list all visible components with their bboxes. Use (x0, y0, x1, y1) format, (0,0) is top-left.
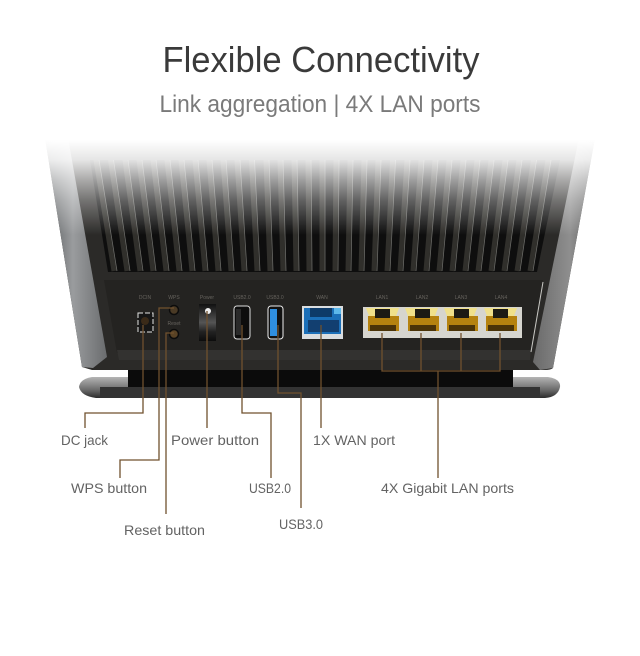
label: LAN ports: 4X Gigabit LAN ports (381, 480, 514, 496)
port labels on panel: Power (200, 295, 214, 301)
label: Power button: Power button (171, 432, 259, 448)
port labels on panel: LAN2 (416, 295, 428, 301)
ventilation grille (90, 160, 560, 272)
label: WPS button: WPS button (71, 480, 147, 496)
leader: LAN ports (382, 333, 500, 478)
leader: WPS button (120, 308, 174, 478)
leader: USB2.0 (242, 325, 271, 478)
title: Flexible Connectivity (162, 39, 480, 80)
LAN port 1 (366, 308, 399, 331)
port labels on panel: LAN4 (495, 295, 507, 301)
LAN port 4 (484, 308, 517, 331)
port labels on panel: Reset (167, 321, 181, 327)
leader: Reset button (166, 333, 174, 514)
label: WAN port: 1X WAN port (313, 432, 395, 448)
port labels on panel: DCIN (139, 295, 151, 301)
port labels on panel: LAN3 (455, 295, 467, 301)
port panel (104, 280, 543, 360)
WAN port (302, 306, 343, 339)
leader: DC jack (85, 325, 143, 428)
leader: WAN port (320, 325, 322, 428)
label: DC jack: DC jack (61, 432, 109, 448)
router illustration (30, 135, 610, 398)
port labels on panel (139, 295, 507, 327)
top fade to white (30, 135, 610, 235)
LAN ports (363, 307, 522, 338)
USB 3.0 port (268, 306, 283, 339)
port labels on panel: LAN1 (376, 295, 388, 301)
USB 2.0 port (234, 306, 250, 339)
label: USB3.0: USB3.0 (279, 516, 323, 532)
subtitle: Link aggregation | 4X LAN ports (160, 91, 480, 118)
Reset button (170, 330, 178, 338)
port labels on panel: USB3.0 (266, 295, 284, 301)
leader: USB3.0 (278, 325, 301, 508)
LAN port 3 (444, 308, 478, 331)
DC jack port (138, 313, 153, 332)
port labels on panel: USB2.0 (233, 295, 251, 301)
callout leader lines (85, 308, 500, 514)
callout labels (61, 432, 514, 538)
LAN port 2 (405, 308, 439, 331)
router stand foot (79, 368, 560, 398)
label: Reset button: Reset button (124, 522, 205, 538)
leader: Power button (206, 311, 208, 428)
WPS button (170, 306, 178, 314)
power rocker switch (199, 304, 216, 341)
port labels on panel: WAN (316, 295, 328, 301)
router body (45, 138, 595, 370)
label: USB2.0: USB2.0 (249, 480, 291, 496)
port labels on panel: WPS (168, 295, 180, 301)
